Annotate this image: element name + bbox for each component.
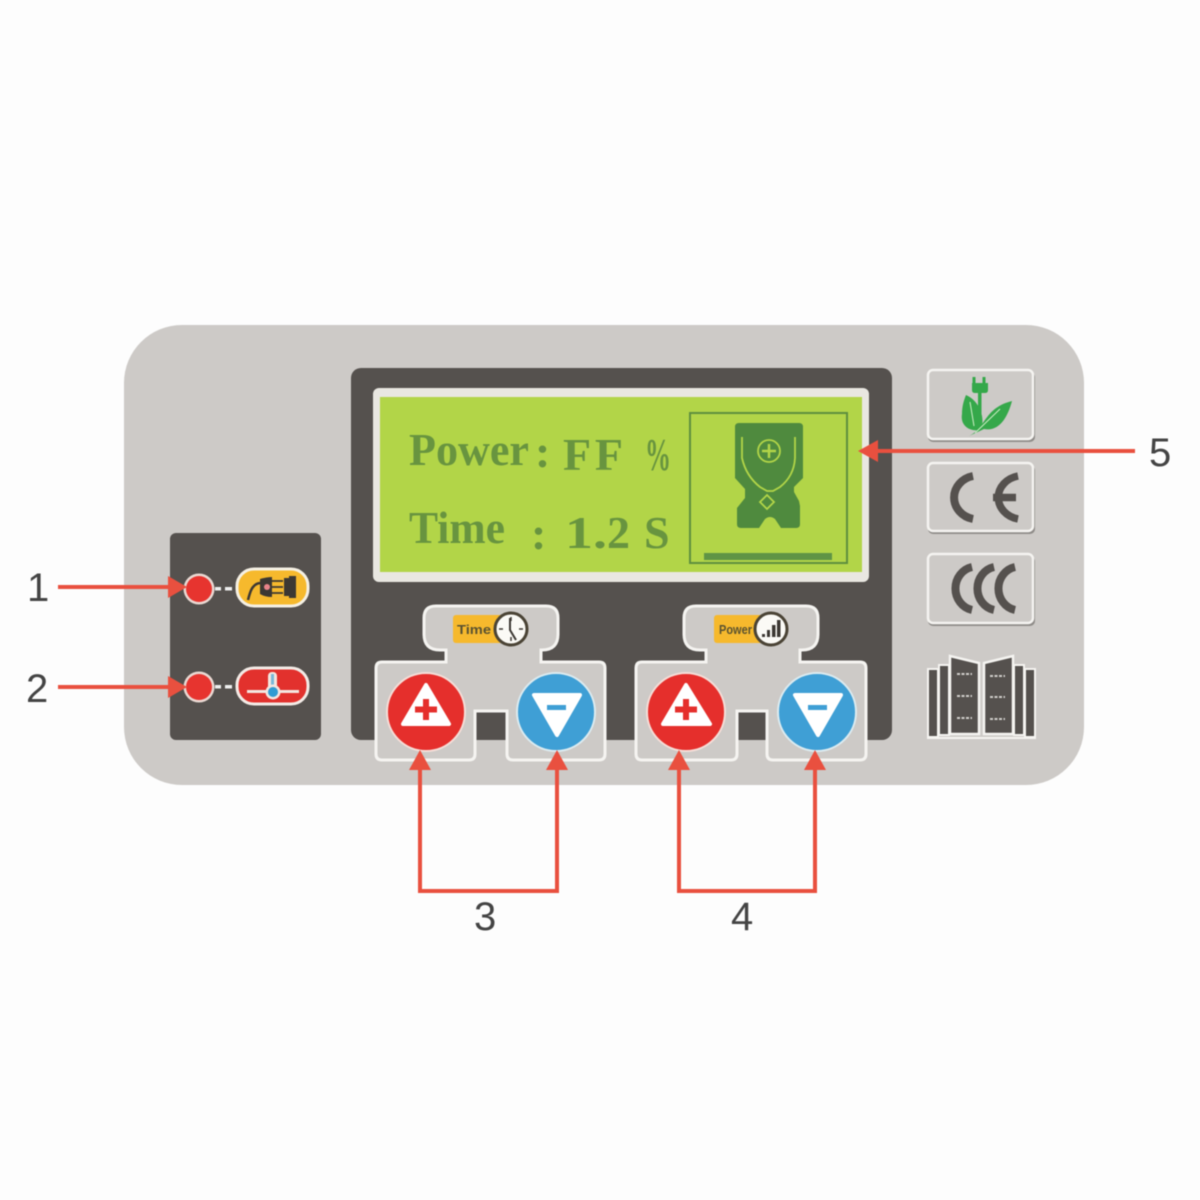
label: power: [714, 613, 787, 645]
LCD text: power: Power: [409, 424, 529, 475]
number 2: 2: [26, 667, 48, 711]
icon: CE mark badge: [928, 463, 1035, 534]
number 5: 5: [1149, 431, 1171, 475]
arrow: callout 3 bracket: [409, 750, 568, 891]
indicator 1: power LED: [184, 574, 232, 604]
button: power down: [778, 673, 856, 751]
LCD text: time: Time: [409, 502, 505, 553]
panel: device body: [124, 325, 1084, 785]
icon: thermometer: [237, 668, 308, 704]
LCD text: power colon: :: [535, 426, 550, 477]
label: power: Power: [719, 622, 752, 637]
panel: LCD screen: [373, 388, 869, 582]
indicator 2: temperature LED: [184, 672, 232, 702]
LCD text: percent sign: %: [645, 429, 671, 480]
number 1: 1: [27, 566, 49, 610]
LCD text: power value: FF: [563, 429, 623, 480]
LCD text: time colon: :: [531, 508, 546, 559]
button group: time: [376, 606, 605, 760]
panel: indicator block: [170, 533, 321, 740]
icon: eco plug badge: [928, 370, 1035, 442]
button: time down: [517, 673, 595, 751]
arrow: callout 2: [58, 676, 187, 698]
panel: display housing: [351, 368, 892, 740]
number 3: 3: [474, 895, 496, 939]
button: power up: [647, 673, 725, 751]
arrow: callout 4 bracket: [668, 750, 826, 891]
icon: CCC mark badge: [928, 554, 1035, 626]
LCD handpiece graphic: [690, 413, 847, 563]
number 4: 4: [731, 895, 753, 939]
icon: open manual: [927, 656, 1036, 738]
button: time up: [387, 673, 465, 751]
LCD text: time value: 1.: [565, 507, 607, 558]
arrow: callout 5: [858, 440, 1135, 462]
button group: power: [636, 606, 866, 760]
label: time: Time: [457, 622, 491, 637]
LCD text: time value digit: 2: [607, 507, 630, 558]
arrow: callout 1: [58, 576, 187, 598]
LCD text: seconds unit: S: [644, 507, 670, 558]
label: time: [453, 613, 527, 645]
icon: power plug: [237, 569, 308, 606]
